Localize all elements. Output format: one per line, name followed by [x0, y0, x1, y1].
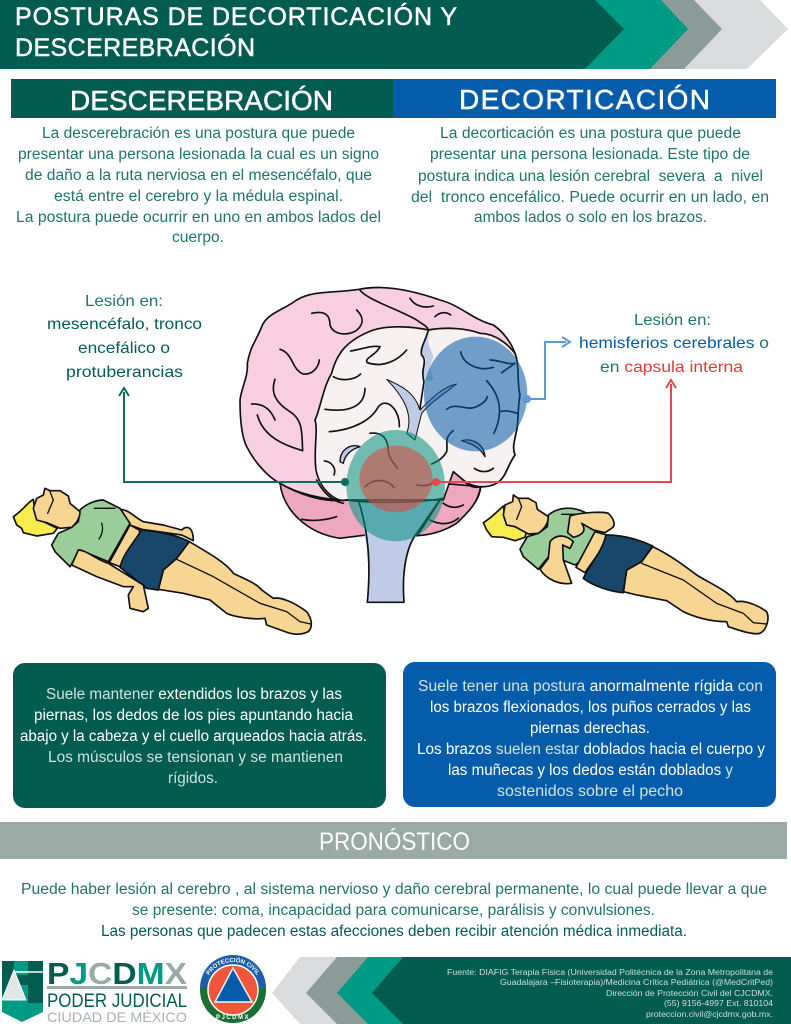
title: DESCEREBRACIÓN	[15, 33, 255, 62]
brain stem	[355, 500, 437, 602]
text block: decorticación: del tronco encefálico. Puede ocurrir en un lado, en	[411, 189, 769, 206]
text block: pronóstico	[21, 881, 767, 940]
label: lesión derecha: en capsula interna	[600, 359, 743, 376]
belly	[576, 532, 607, 573]
shirt	[52, 500, 130, 567]
title	[15, 2, 457, 62]
text block: descerebración: de daño a la ruta nerviosa en el mesencéfalo, que	[25, 167, 372, 184]
source text: Guadalajara –Fisioterapia)/Medicina Crítica Pediátrica (@MedCritPed)	[500, 977, 773, 987]
panel: descerebración: Suele mantener extendidos los brazos y las	[46, 686, 342, 703]
heading: pronóstico	[0, 822, 787, 859]
logo: protección civil: PJCDMX	[216, 1015, 250, 1021]
label: lesión izquierda: protuberancias	[66, 364, 183, 381]
label: lesión derecha	[579, 312, 769, 376]
footer chevrons	[272, 957, 791, 1024]
heading: decorticación: DECORTICACIÓN	[459, 84, 710, 115]
brain illustration	[240, 288, 527, 602]
shorts	[120, 530, 189, 590]
blue highlight	[424, 337, 527, 451]
label: lesión izquierda: encefálico o	[78, 340, 170, 357]
figure: descerebración posture	[13, 488, 311, 634]
text block: pronóstico: se presente: coma, incapacidad para comunicarse, parálisis y convulsiones.	[132, 902, 655, 919]
panel: descerebración: piernas, los dedos de los pies apuntando hacia	[34, 707, 353, 724]
text block: descerebración: cuerpo.	[172, 229, 224, 246]
text block: decorticación: postura indica una lesión cerebral severa a nivel	[418, 168, 763, 185]
shirt	[520, 508, 598, 569]
logo: protección civil: PROTECCIÓN CIVIL	[206, 957, 259, 976]
cerebellum right lobe	[417, 483, 481, 536]
text block: decorticación: La decorticación es una postura que puede	[440, 125, 741, 142]
source text: proteccion.civil@cjcdmx.gob.mx.	[646, 1009, 773, 1019]
logo: PJCDMX: PODER JUDICIAL	[47, 991, 187, 1012]
title: POSTURAS DE DECORTICACIÓN Y	[15, 2, 457, 31]
text block: descerebración: presentar una persona lesionada la cual es un signo	[18, 146, 379, 163]
arrow: green	[119, 388, 348, 485]
text block: descerebración: La postura puede ocurrir en uno en ambos lados del	[16, 209, 381, 226]
panel: descerebración: abajo y la cabeza y el cuello arqueados hacia atrás.	[20, 728, 367, 745]
ventricles	[387, 379, 457, 440]
legs	[623, 547, 768, 634]
near arm	[72, 550, 148, 612]
panel: decorticación: piernas derechas.	[530, 720, 650, 737]
panel: descerebración	[13, 663, 386, 808]
teal highlight	[346, 430, 445, 541]
hair	[13, 499, 57, 536]
text block: decorticación: presentar una persona lesionada. Este tipo de	[430, 146, 750, 163]
figure: decorticación posture	[483, 495, 768, 634]
source text: Dirección de Protección Civil del CJCDMX.	[606, 988, 773, 998]
legs	[158, 542, 311, 634]
head	[503, 495, 548, 534]
shorts	[583, 535, 653, 593]
red highlight	[359, 446, 433, 512]
text block: decorticación: ambos lados o solo en los brazos.	[474, 209, 707, 226]
text block: decorticación	[411, 125, 769, 226]
panel: decorticación: Los brazos suelen estar doblados hacia el cuerpo y	[417, 741, 765, 758]
cerebellum	[280, 470, 481, 538]
logo: PJCDMX	[2, 956, 187, 1024]
text block: descerebración: está entre el cerebro y la médula espinal.	[54, 188, 343, 205]
arrow: red	[433, 380, 676, 485]
shield	[2, 961, 43, 1022]
wordmark: PJCDMX	[47, 956, 187, 991]
gyri lines	[359, 289, 428, 408]
text block: descerebración: La descerebración es una postura que puede	[42, 125, 355, 142]
panel: descerebración: rígidos.	[168, 770, 218, 787]
cerebrum inner	[315, 327, 520, 500]
label: lesión derecha: hemisferios cerebrales o	[579, 335, 769, 352]
panel: decorticación: sostenidos sobre el pecho	[497, 783, 683, 800]
panel: decorticación: los brazos flexionados, los puños cerrados y las	[430, 699, 751, 716]
head	[33, 488, 80, 528]
panel: decorticación: las muñecas y los dedos están doblados y	[448, 762, 733, 779]
heading: decorticación	[393, 79, 776, 118]
label: lesión derecha: Lesión en:	[634, 312, 711, 329]
header banner	[0, 0, 788, 69]
label: lesión izquierda	[47, 293, 202, 381]
panel: decorticación	[403, 662, 776, 807]
far arm	[120, 509, 193, 541]
hair	[483, 506, 527, 541]
heading: descerebración: DESCEREBRACIÓN	[70, 85, 333, 116]
label: lesión izquierda: mesencéfalo, tronco	[47, 316, 202, 333]
arms	[568, 512, 614, 537]
heading: descerebración	[11, 79, 393, 118]
panel: descerebración: Los músculos se tensionan y se mantienen	[48, 749, 343, 766]
source text	[447, 967, 773, 1019]
cerebrum	[240, 288, 520, 500]
text block: descerebración	[16, 125, 381, 246]
logo: protección civil	[200, 955, 266, 1023]
source text: (55) 9156-4997 Ext. 810104	[664, 998, 773, 1008]
text block: pronóstico: Las personas que padecen estas afecciones deben recibir atención médica inmediata.	[101, 923, 687, 940]
arrow: blue	[524, 337, 570, 402]
source text: Fuente: DIAFIG Terapia Física (Universidad Politécnica de la Zona Metropolitana de	[447, 967, 773, 977]
label: lesión izquierda: Lesión en:	[85, 293, 163, 310]
text block: pronóstico: Puede haber lesión al cerebro , al sistema nervioso y daño cerebral permanente, lo cual puede llevar a que	[21, 881, 767, 898]
heading: pronóstico: PRONÓSTICO	[319, 827, 470, 856]
belly	[109, 525, 140, 567]
panel: decorticación: Suele tener una postura anormalmente rígida con	[418, 678, 763, 695]
